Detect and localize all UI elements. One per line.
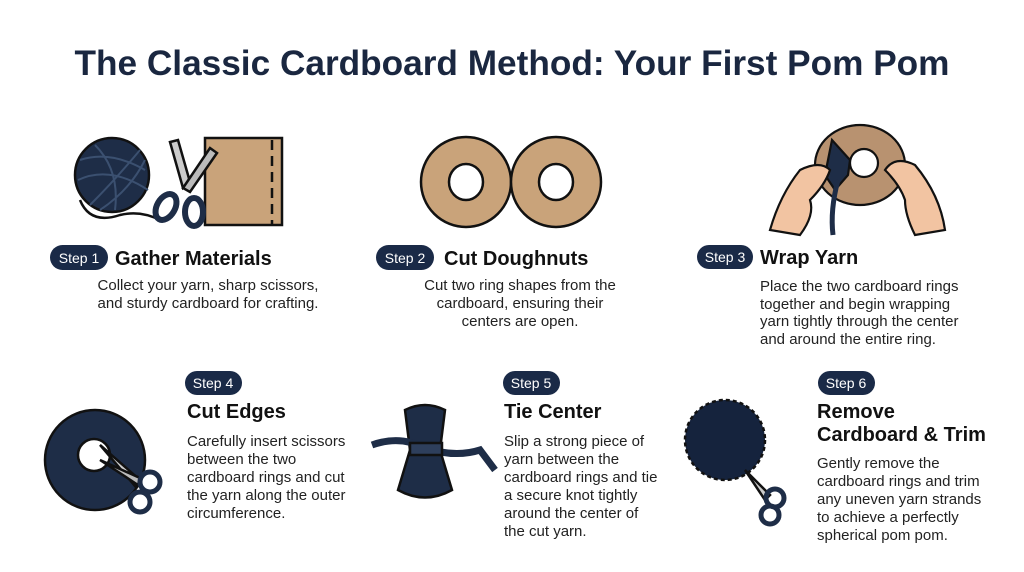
- body 2: centers are open.: [462, 313, 578, 330]
- body 6: any uneven yarn strands: [817, 491, 981, 508]
- body 5: cardboard rings and tie: [504, 469, 657, 486]
- body 6: cardboard rings and trim: [817, 473, 980, 490]
- body 5: the cut yarn.: [504, 523, 587, 540]
- body 3: yarn tightly through the center: [760, 313, 958, 330]
- step pill 4: [185, 371, 242, 395]
- step pill 3: [697, 245, 753, 269]
- body 4: Carefully insert scissors: [187, 433, 345, 450]
- heading 6: Remove: [817, 401, 895, 423]
- step pill 6: [818, 371, 875, 395]
- body 4: the yarn along the outer: [187, 487, 345, 504]
- step pill 6: Step 6: [826, 375, 866, 391]
- step pill 1: [50, 245, 108, 270]
- panel: step 5: [372, 371, 657, 540]
- body 2: cardboard, ensuring their: [437, 295, 603, 312]
- heading 3: Wrap Yarn: [760, 247, 858, 269]
- body 3: Place the two cardboard rings: [760, 278, 958, 295]
- icon: cardboard rings: [421, 137, 601, 227]
- panel: step 6: [685, 371, 986, 544]
- heading 5: Tie Center: [504, 401, 602, 423]
- step pill 3: Step 3: [705, 249, 745, 265]
- body 5: Slip a strong piece of: [504, 433, 645, 450]
- step pill 1: Step 1: [59, 250, 99, 266]
- heading 2: Cut Doughnuts: [444, 248, 588, 270]
- body 3: and around the entire ring.: [760, 331, 936, 348]
- body 6: spherical pom pom.: [817, 527, 948, 544]
- body 1: and sturdy cardboard for crafting.: [98, 295, 318, 312]
- body 5: yarn between the: [504, 451, 619, 468]
- icon: wrapped ring with scissors: [45, 410, 160, 512]
- icon: hands wrapping yarn: [770, 125, 945, 235]
- body 6: Gently remove the: [817, 455, 940, 472]
- icon: tied yarn bundle: [372, 405, 495, 498]
- body 4: circumference.: [187, 505, 285, 522]
- panel: step 4: [45, 371, 345, 522]
- step pill 5: [503, 371, 560, 395]
- heading 4: Cut Edges: [187, 401, 286, 423]
- heading 1: Gather Materials: [115, 248, 272, 270]
- icon: pom pom with scissors: [685, 400, 784, 524]
- body 1: Collect your yarn, sharp scissors,: [98, 277, 318, 294]
- panel: step 2: [376, 137, 616, 330]
- body 5: around the center of: [504, 505, 639, 522]
- title: The Classic Cardboard Method: Your First Pom Pom: [74, 44, 950, 83]
- body 2: Cut two ring shapes from the: [424, 277, 616, 294]
- body 3: together and begin wrapping: [760, 296, 950, 313]
- body 4: cardboard rings and cut: [187, 469, 345, 486]
- step pill 2: Step 2: [385, 250, 425, 266]
- body 5: a secure knot tightly: [504, 487, 638, 504]
- icon: yarn ball, scissors, cardboard: [75, 138, 282, 226]
- panel: step 3: [697, 125, 958, 348]
- body 6: to achieve a perfectly: [817, 509, 959, 526]
- panel: step 1: [50, 138, 318, 312]
- step pill 2: [376, 245, 434, 270]
- heading 6: Cardboard & Trim: [817, 424, 986, 446]
- step pill 4: Step 4: [193, 375, 233, 391]
- body 4: between the two: [187, 451, 296, 468]
- step pill 5: Step 5: [511, 375, 551, 391]
